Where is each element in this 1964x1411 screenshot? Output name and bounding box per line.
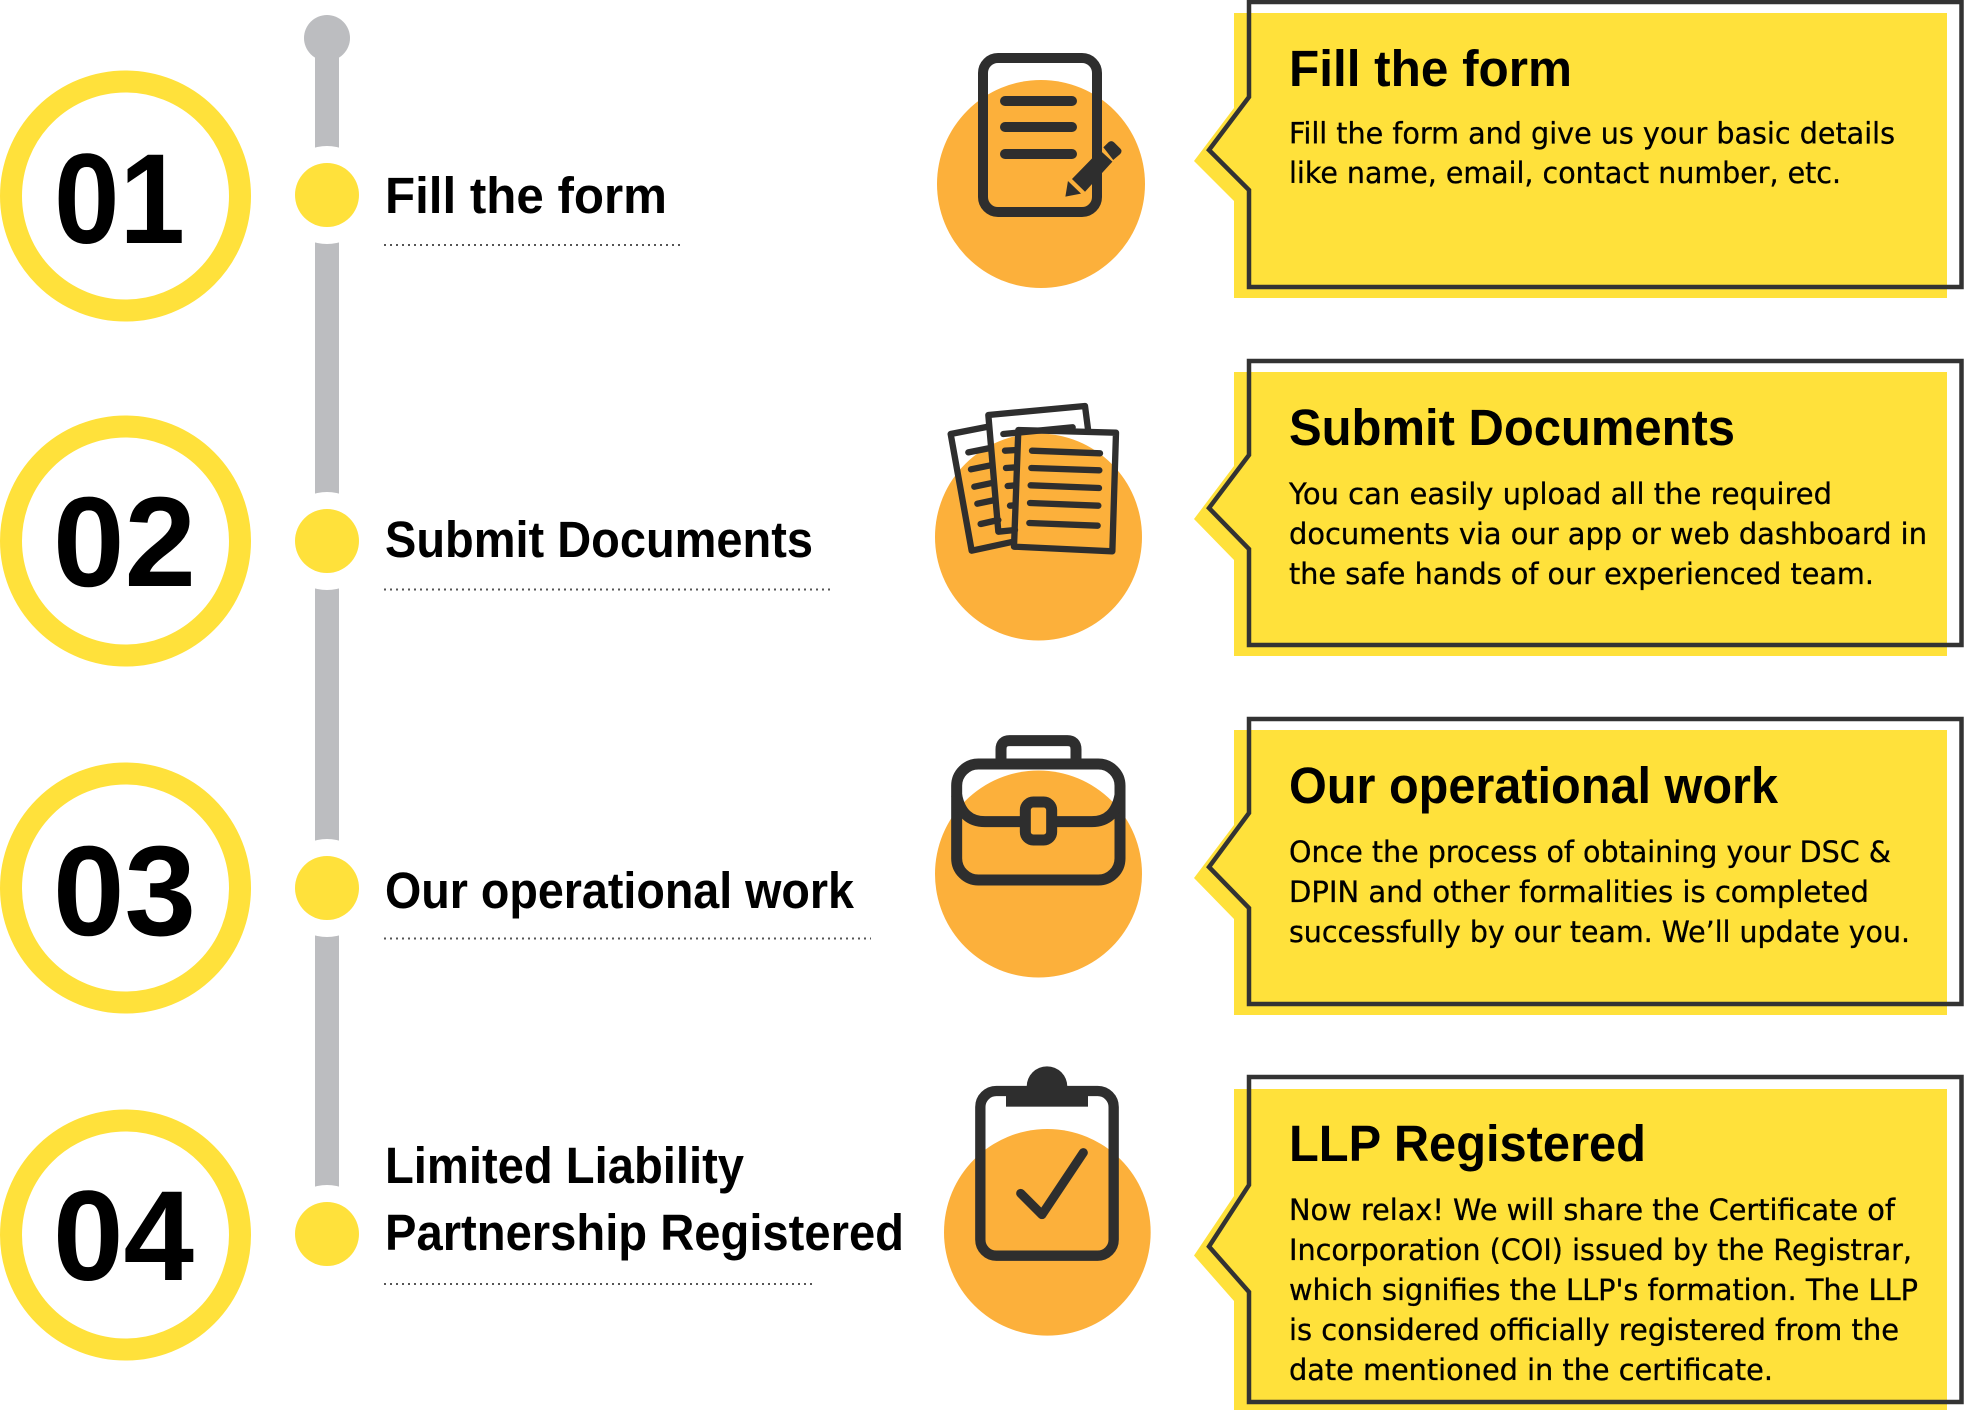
step 1 timeline dot — [278, 146, 376, 244]
panel: fill the form — [1194, 2, 1962, 298]
step 4 label — [384, 1137, 904, 1284]
step 4 label: Partnership Registered — [385, 1204, 904, 1261]
step 3 number badge: 03 — [53, 820, 196, 963]
step 2 number badge — [11, 426, 240, 656]
panel: LLP registered: which signifies the LLP's formation. The LLP — [1289, 1273, 1918, 1307]
step 4 timeline dot — [278, 1185, 376, 1283]
step 4 number badge: 04 — [53, 1165, 194, 1308]
panel: LLP registered: LLP Registered — [1289, 1115, 1646, 1172]
step 2 timeline dot — [278, 492, 376, 590]
step 1 number badge: 01 — [54, 128, 185, 271]
panel: submit documents — [1194, 361, 1962, 656]
panel: LLP registered: date mentioned in the certificate. — [1289, 1353, 1773, 1387]
panel: our operational work — [1194, 719, 1962, 1015]
panel: fill the form: like name, email, contact number, etc. — [1289, 156, 1841, 190]
panel: fill the form: Fill the form and give us your basic details — [1289, 116, 1895, 150]
timeline line — [304, 15, 350, 1198]
panel: LLP registered: Incorporation (COI) issued by the Registrar, — [1289, 1233, 1912, 1267]
step 1 label: Fill the form — [385, 167, 667, 224]
step 4 label: Limited Liability — [385, 1137, 745, 1194]
panel: submit documents: the safe hands of our experienced team. — [1289, 557, 1874, 591]
panel: LLP registered: is considered officially registered from the — [1289, 1313, 1899, 1347]
icon: briefcase — [935, 741, 1142, 977]
step 1 number badge — [11, 82, 240, 310]
panel: LLP registered: Now relax! We will share the Certificate of — [1289, 1193, 1896, 1227]
step 3 number badge — [11, 774, 240, 1002]
panel: our operational work: Our operational work — [1289, 757, 1779, 814]
step 4 number badge — [11, 1120, 240, 1350]
panel: LLP registered — [1194, 1077, 1962, 1410]
panel: our operational work: successfully by our team. We’ll update you. — [1289, 915, 1910, 949]
step 3 timeline dot — [278, 839, 376, 937]
panel: our operational work: DPIN and other formalities is completed — [1289, 875, 1869, 909]
panel: submit documents: Submit Documents — [1289, 399, 1735, 456]
panel: our operational work: Once the process of obtaining your DSC & — [1289, 835, 1891, 869]
panel: submit documents: You can easily upload all the required — [1288, 477, 1832, 511]
step 2 label: Submit Documents — [385, 511, 813, 568]
step 2 number badge: 02 — [53, 471, 196, 614]
panel: fill the form: Fill the form — [1289, 40, 1572, 97]
panel: submit documents: documents via our app or web dashboard in — [1289, 517, 1927, 551]
icon: documents — [935, 406, 1142, 640]
step 3 label: Our operational work — [385, 862, 855, 919]
icon: form with pencil — [937, 58, 1145, 288]
icon: clipboard with check — [944, 1066, 1151, 1336]
